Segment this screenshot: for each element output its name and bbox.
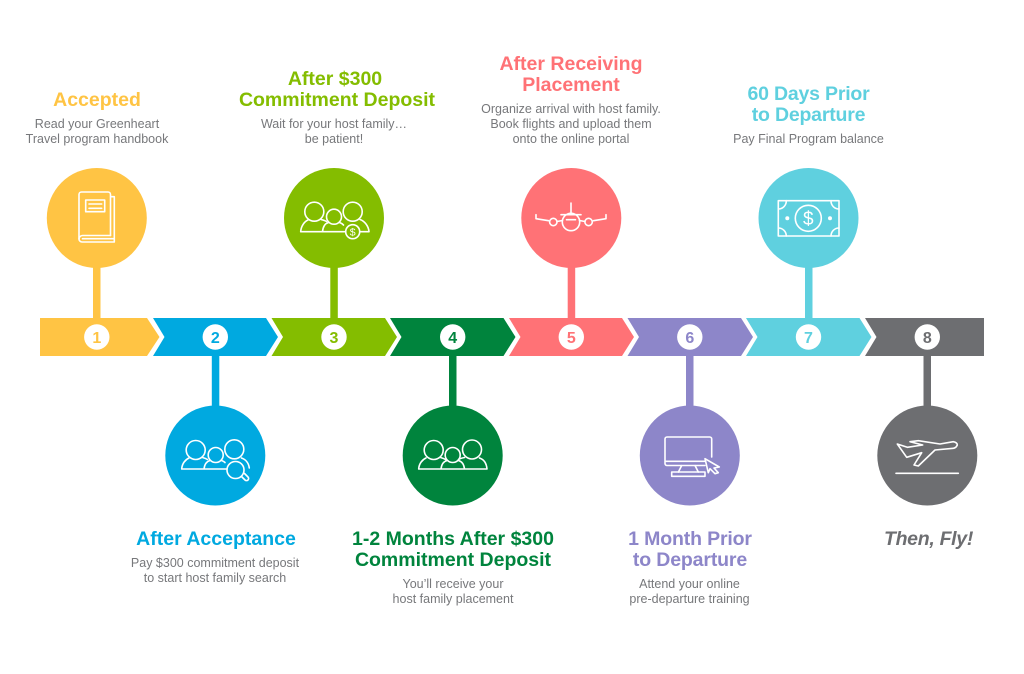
number badge 1 [84, 324, 110, 350]
number badge 2: 2 [211, 330, 220, 347]
stem and circle 4 [403, 350, 503, 506]
text: step 4 description: You’ll receive your [403, 577, 503, 591]
stem and circle 5 [521, 168, 621, 320]
icon glyph: coin dollar: $ [350, 226, 356, 238]
heading: after $300 commitment deposit: After $300 [288, 68, 382, 90]
text: step 3 description: be patient! [305, 132, 363, 146]
stem and circle 1 [47, 168, 147, 320]
text: step 7 description: Pay Final Program balance [733, 132, 884, 146]
heading: 1-2 months after deposit: Commitment Deposit [355, 549, 552, 571]
number badge 7 [796, 324, 821, 350]
number badge 3: 3 [330, 330, 339, 347]
step 8: then fly [865, 318, 984, 550]
number badge 8: 8 [923, 330, 932, 347]
step 7: sixty days prior [733, 83, 884, 356]
icon glyph: bill dollar: $ [803, 209, 814, 230]
icon: dollar bill [778, 201, 839, 236]
stem and circle 7 [758, 168, 858, 320]
stem and circle 6 [640, 350, 740, 506]
arrow segment 8 [865, 318, 984, 356]
number badge 2 [203, 324, 228, 350]
arrow segment 5 [509, 318, 634, 356]
number badge 5 [559, 324, 584, 350]
icon: plane taking off [896, 441, 958, 473]
number badge 4 [440, 324, 465, 350]
text: step 5 description: onto the online portal [513, 132, 629, 146]
text: step 6 description: pre-departure training [629, 592, 750, 606]
number badge 3 [321, 324, 347, 350]
heading: 60 days prior to departure: to Departure [752, 104, 866, 126]
arrow segment 4 [390, 318, 516, 356]
arrow segment 6 [628, 318, 753, 356]
text: step 1 description: Read your Greenheart [35, 117, 159, 131]
stem and circle 8 [877, 350, 977, 506]
stem and circle 2 [165, 350, 265, 506]
heading: after $300 commitment deposit: Commitment Deposit [239, 89, 436, 111]
text: step 2 description: to start host family search [144, 571, 286, 585]
number badge 6: 6 [685, 330, 694, 347]
heading: 1-2 months after deposit: 1-2 Months After $300 [352, 528, 554, 550]
heading: after receiving placement: Placement [522, 74, 620, 96]
text: step 6 description: Attend your online [639, 577, 740, 591]
arrow segment 1 [40, 318, 160, 356]
step 5: after receiving placement [481, 53, 661, 356]
number badge 7: 7 [804, 330, 813, 347]
step 4: host family placement [352, 318, 554, 606]
number badge 6 [677, 324, 702, 350]
heading: 1 month prior to departure: to Departure [633, 549, 747, 571]
stem and circle 3 [284, 168, 384, 320]
heading: after receiving placement: After Receiving [499, 53, 643, 75]
text: step 3 description: Wait for your host family… [261, 117, 407, 131]
text: step 1 description: Travel program handbook [26, 132, 169, 146]
step 6: one month prior [628, 318, 753, 606]
text: step 2 description: Pay $300 commitment deposit [131, 556, 299, 570]
icon: people with magnifier [182, 440, 249, 481]
icon: book [79, 192, 114, 242]
icon: computer monitor with cursor [665, 437, 719, 476]
heading: after acceptance: After Acceptance [136, 528, 296, 550]
text: step 5 description: Book flights and upload them [490, 117, 652, 131]
step 1: accepted [26, 89, 169, 356]
icon: people with dollar coin [301, 202, 369, 239]
step 2: after acceptance [131, 318, 300, 585]
heading: 60 days prior to departure: 60 Days Prior [747, 83, 870, 105]
heading: 1 month prior to departure: 1 Month Prior [628, 528, 752, 550]
icon: people [419, 440, 487, 469]
heading: then, fly: Then, Fly! [884, 528, 974, 550]
arrow segment 7 [746, 318, 872, 356]
step 3: after commitment deposit [239, 68, 436, 356]
arrow segment 3 [272, 318, 397, 356]
number badge 4: 4 [448, 330, 457, 347]
text: step 4 description: host family placement [393, 592, 514, 606]
number badge 1: 1 [92, 330, 101, 347]
number badge 8 [915, 324, 940, 350]
heading: accepted: Accepted [53, 89, 141, 111]
arrow segment 2 [153, 318, 278, 356]
number badge 5: 5 [567, 330, 576, 347]
icon: plane front view [536, 203, 606, 231]
text: step 5 description: Organize arrival with host family. [481, 102, 661, 116]
